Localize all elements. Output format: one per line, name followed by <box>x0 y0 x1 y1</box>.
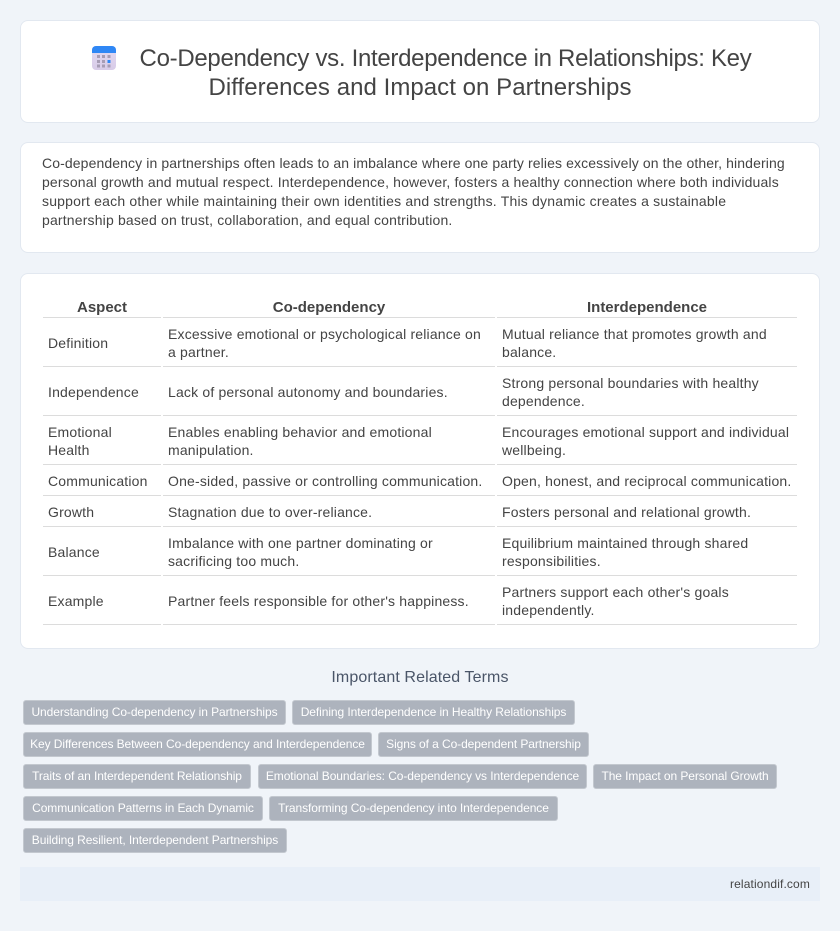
text: Partners support each other's goals <box>502 584 729 600</box>
table card <box>20 273 820 649</box>
text: Imbalance with one partner dominating or <box>168 535 433 551</box>
text: sacrificing too much. <box>168 553 299 569</box>
header: interdependence: Interdependence <box>587 299 707 316</box>
header: aspect: Aspect <box>77 299 127 316</box>
text: dependence. <box>502 393 585 409</box>
text: Mutual reliance that promotes growth and <box>502 326 767 342</box>
intro paragraph <box>42 155 785 228</box>
related terms heading: Important Related Terms <box>331 669 509 686</box>
text: independently. <box>502 602 595 618</box>
text: Enables enabling behavior and emotional <box>168 424 432 440</box>
row: emotional health <box>48 424 112 458</box>
tag: Traits of an Interdependent Relationship <box>32 769 242 783</box>
intro paragraph: Co-dependency in partnerships often leads to an imbalance where one party relies excessively on the other, hindering <box>42 155 785 171</box>
tag <box>258 764 587 789</box>
tag <box>593 764 777 789</box>
tag: Communication Patterns in Each Dynamic <box>32 801 254 815</box>
intro paragraph: partnership based on trust, collaboration, and equal contribution. <box>42 212 452 228</box>
text: balance. <box>502 344 556 360</box>
text: One-sided, passive or controlling communication. <box>168 473 482 489</box>
row: definition: Definition <box>48 335 108 351</box>
tag <box>292 700 575 725</box>
text: manipulation. <box>168 442 254 458</box>
text: Strong personal boundaries with healthy <box>502 375 759 391</box>
tag: The Impact on Personal Growth <box>601 769 769 783</box>
intro paragraph: personal growth and mutual respect. Interdependence, however, fosters a healthy connection where both individuals <box>42 174 779 190</box>
text: Partner feels responsible for other's happiness. <box>168 593 469 609</box>
tag <box>269 796 558 821</box>
text: Open, honest, and reciprocal communication. <box>502 473 791 489</box>
text: Encourages emotional support and individual <box>502 424 789 440</box>
intro card <box>20 142 820 253</box>
text: Equilibrium maintained through shared <box>502 535 748 551</box>
text: Lack of personal autonomy and boundaries. <box>168 384 448 400</box>
text: Stagnation due to over-reliance. <box>168 504 372 520</box>
footer text: relationdif.com <box>730 877 810 891</box>
row: balance: Balance <box>48 544 100 560</box>
intro paragraph: support each other while maintaining their own identities and strengths. This dynamic creates a sustainable <box>42 193 726 209</box>
row: emotional health: Emotional <box>48 424 112 440</box>
tag <box>23 796 263 821</box>
row: communication: Communication <box>48 473 148 489</box>
title: Co-Dependency vs. Interdependence in Relationships: Key <box>140 45 751 72</box>
tag: Understanding Co-dependency in Partnerships <box>31 705 278 719</box>
tag: Building Resilient, Interdependent Partnerships <box>32 833 278 847</box>
text: wellbeing. <box>502 442 566 458</box>
footer bar <box>20 867 820 901</box>
text: a partner. <box>168 344 229 360</box>
tag: Defining Interdependence in Healthy Relationships <box>301 705 566 719</box>
tag: Signs of a Co-dependent Partnership <box>386 737 581 751</box>
text: responsibilities. <box>502 553 601 569</box>
comparison table <box>43 297 797 626</box>
tag <box>23 700 286 725</box>
tag: Emotional Boundaries: Co-dependency vs Interdependence <box>266 769 579 783</box>
header: co-dependency: Co-dependency <box>273 299 385 316</box>
row: growth: Growth <box>48 504 94 520</box>
title: Differences and Impact on Partnerships <box>208 74 632 101</box>
row: emotional health: Health <box>48 442 90 458</box>
tag <box>23 764 251 789</box>
tag: Key Differences Between Co-dependency and Interdependence <box>30 737 365 751</box>
tag <box>23 828 287 853</box>
text: Excessive emotional or psychological reliance on <box>168 326 481 342</box>
text: Fosters personal and relational growth. <box>502 504 751 520</box>
tag: Transforming Co-dependency into Interdependence <box>278 801 549 815</box>
title <box>140 45 752 101</box>
tag <box>378 732 589 757</box>
row: independence: Independence <box>48 384 139 400</box>
header card <box>20 20 820 123</box>
tag <box>23 732 372 757</box>
icon: calendar <box>92 46 116 70</box>
row: example: Example <box>48 593 104 609</box>
